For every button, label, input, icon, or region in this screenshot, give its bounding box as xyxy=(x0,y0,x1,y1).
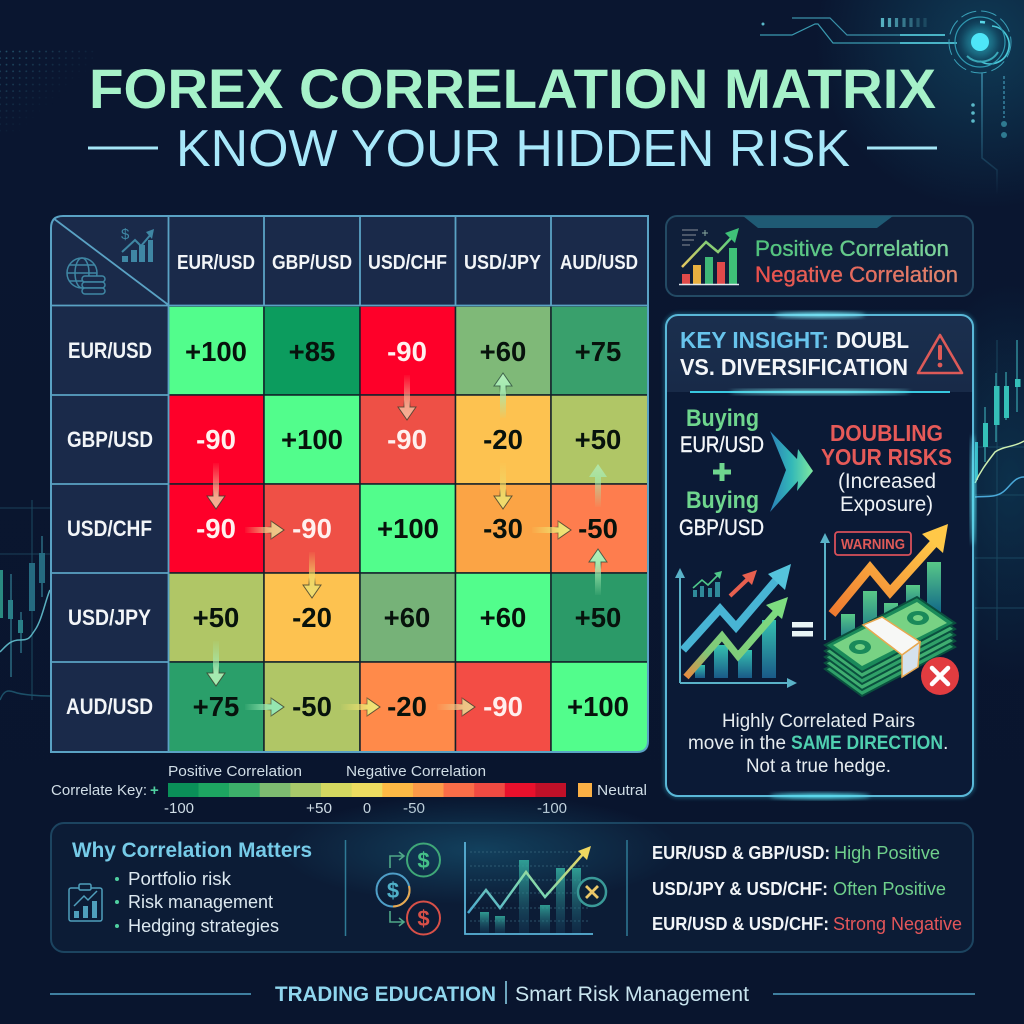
panel: correlation legend xyxy=(666,216,973,296)
decoration: top right circuit and target xyxy=(760,11,1011,195)
matrix values: -90 xyxy=(292,513,332,544)
bullet list: Portfolio risk xyxy=(128,869,232,889)
insight caption xyxy=(688,710,948,777)
doubling your risks text: Exposure) xyxy=(840,493,933,516)
background xyxy=(0,0,1024,618)
pair relationships: Strong Negative xyxy=(833,914,962,934)
panel: key insight xyxy=(666,312,975,798)
correlation key: -100 xyxy=(537,801,567,817)
pair relationships: USD/JPY & USD/CHF: xyxy=(652,879,828,899)
matrix cells xyxy=(168,306,648,752)
pair relationships: EUR/USD & GBP/USD: xyxy=(652,843,830,863)
row headers: AUD/USD xyxy=(66,694,153,719)
warning label xyxy=(835,532,911,555)
icon: chart with dollar xyxy=(121,226,154,262)
matrix values: -20 xyxy=(483,424,523,455)
doubling your risks text: DOUBLING xyxy=(830,420,943,446)
insight caption: Not a true hedge. xyxy=(746,755,891,777)
arrow: chevron to result xyxy=(770,431,813,512)
insight caption: . xyxy=(943,732,948,754)
row headers: EUR/USD xyxy=(68,338,152,363)
matrix values: -90 xyxy=(387,336,427,367)
matrix values: +85 xyxy=(289,336,335,367)
pair relationships: EUR/USD & USD/CHF: xyxy=(652,914,829,934)
footer: TRADING EDUCATION xyxy=(275,983,496,1006)
correlation key: + xyxy=(150,782,159,799)
buying pairs: Buying xyxy=(686,487,759,514)
key insight heading: KEY INSIGHT: xyxy=(680,327,829,353)
matrix values: -20 xyxy=(292,602,332,633)
matrix values: -20 xyxy=(387,691,427,722)
column headers xyxy=(177,251,638,274)
panel: correlation legend: Positive Correlation xyxy=(755,236,949,261)
correlation key: Negative Correlation xyxy=(346,764,486,780)
key insight heading xyxy=(680,327,909,380)
bullet list xyxy=(115,869,279,936)
footer xyxy=(50,981,975,1006)
matrix values: -50 xyxy=(578,513,618,544)
arrows between cells xyxy=(207,373,607,716)
icon: red x badge xyxy=(921,657,959,695)
buying pairs: GBP/USD xyxy=(679,515,764,540)
correlation key: Neutral xyxy=(597,783,647,799)
doubling your risks text xyxy=(821,420,952,516)
buying pairs xyxy=(679,405,764,540)
matrix values: -50 xyxy=(292,691,332,722)
correlation key: 0 xyxy=(363,801,371,817)
matrix values: +100 xyxy=(377,513,439,544)
row headers: USD/CHF xyxy=(67,516,152,541)
icon: globe and coins xyxy=(67,258,105,294)
bullet list: Risk management xyxy=(128,892,273,912)
column headers: USD/CHF xyxy=(368,251,447,274)
matrix values: +75 xyxy=(575,336,621,367)
correlation key: -50 xyxy=(403,801,425,817)
matrix values: +60 xyxy=(480,602,526,633)
title: FOREX CORRELATION MATRIX xyxy=(89,57,936,120)
panel: correlation matrix xyxy=(51,216,648,752)
correlation key: +50 xyxy=(306,801,332,817)
column headers: GBP/USD xyxy=(272,251,352,274)
column headers: EUR/USD xyxy=(177,251,255,274)
matrix values: +100 xyxy=(567,691,629,722)
matrix values: +50 xyxy=(193,602,239,633)
key insight heading: DOUBL xyxy=(836,327,909,353)
chart: line and bars xyxy=(465,842,606,934)
chart: two correlated pairs xyxy=(675,564,797,688)
icon: dollar circles: $ xyxy=(387,878,399,903)
matrix values: +50 xyxy=(575,424,621,455)
matrix values: -30 xyxy=(483,513,523,544)
matrix values: +50 xyxy=(575,602,621,633)
buying pairs: EUR/USD xyxy=(680,432,764,457)
pair relationships: High Positive xyxy=(834,843,940,863)
matrix values xyxy=(185,336,629,722)
icon: money stack xyxy=(825,597,955,696)
buying pairs: Buying xyxy=(686,405,759,432)
icon: dollar circles xyxy=(376,844,440,934)
footer: Smart Risk Management xyxy=(515,983,749,1006)
subtitle: KNOW YOUR HIDDEN RISK xyxy=(176,120,850,178)
matrix values: +100 xyxy=(185,336,247,367)
heading: Why Correlation Matters xyxy=(72,838,312,862)
matrix values: +60 xyxy=(384,602,430,633)
equals sign xyxy=(792,622,813,636)
decoration: right candlesticks and lines xyxy=(975,340,1024,640)
icon: clipboard chart xyxy=(69,884,102,921)
row headers: GBP/USD xyxy=(67,427,153,452)
correlation key: Correlate Key: xyxy=(51,783,147,799)
icon: chart with dollar: $ xyxy=(121,226,130,243)
insight caption: move in the xyxy=(688,732,786,754)
insight caption: Highly Correlated Pairs xyxy=(722,710,915,732)
doubling your risks text: YOUR RISKS xyxy=(821,444,952,470)
chart: warning chart with money xyxy=(820,524,959,696)
matrix values: -90 xyxy=(196,424,236,455)
matrix values: +60 xyxy=(480,336,526,367)
matrix values: -90 xyxy=(387,424,427,455)
insight caption: SAME DIRECTION xyxy=(791,732,943,754)
decoration: left candlesticks xyxy=(0,500,50,700)
row headers: USD/JPY xyxy=(68,605,151,630)
panel: why correlation matters xyxy=(51,795,973,952)
panel: correlation legend: Negative Correlation xyxy=(755,262,958,287)
column headers: USD/JPY xyxy=(464,251,541,274)
column headers: AUD/USD xyxy=(560,251,638,274)
matrix values: +75 xyxy=(193,691,239,722)
icon: warning triangle xyxy=(918,335,962,373)
pair relationships xyxy=(652,843,962,934)
correlation key: -100 xyxy=(164,801,194,817)
matrix values: -90 xyxy=(483,691,523,722)
warning label: WARNING xyxy=(841,536,905,553)
key insight heading: VS. DIVERSIFICATION xyxy=(680,354,908,380)
correlation key: Positive Correlation xyxy=(168,764,302,780)
pair relationships: Often Positive xyxy=(833,879,946,899)
icon: x circle xyxy=(578,878,606,906)
matrix values: +100 xyxy=(281,424,343,455)
icon: legend bar chart xyxy=(679,228,739,284)
correlation key xyxy=(51,764,647,817)
matrix values: -90 xyxy=(196,513,236,544)
bullet list: Hedging strategies xyxy=(128,916,279,936)
gradient key bar xyxy=(168,783,566,797)
icon: dollar circles: $ xyxy=(417,848,430,873)
icon: dollar circles: $ xyxy=(417,906,430,931)
doubling your risks text: (Increased xyxy=(838,470,936,493)
row headers xyxy=(66,338,153,719)
